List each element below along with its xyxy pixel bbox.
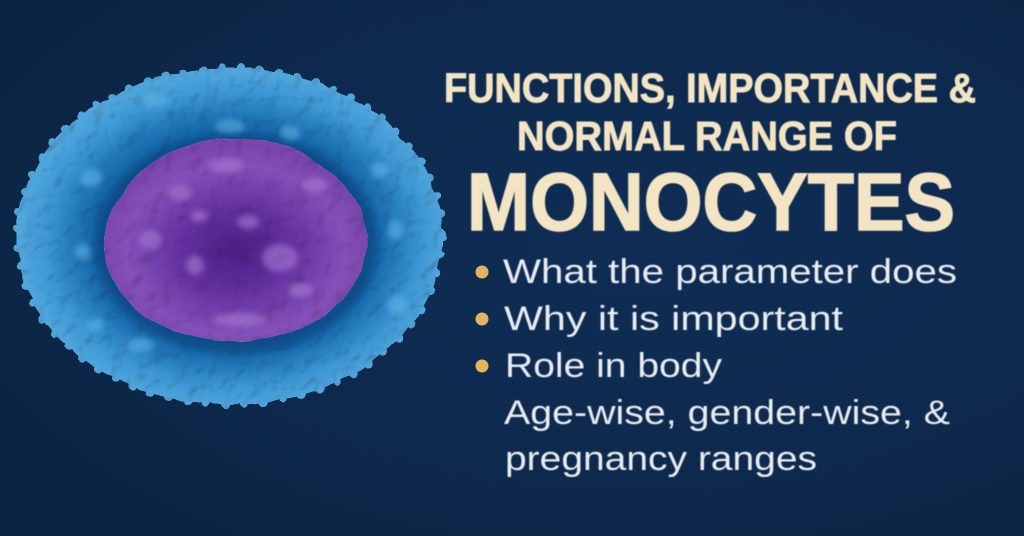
bullet list bbox=[476, 253, 957, 478]
bullet 3: Role in body bbox=[505, 347, 722, 385]
continuation text line 2: pregnancy ranges bbox=[505, 440, 817, 478]
cytoplasm surface granules bbox=[75, 93, 407, 352]
heading bbox=[444, 65, 976, 248]
continuation text line 1: Age-wise, gender-wise, & bbox=[504, 394, 950, 432]
heading line 3: MONOCYTES: MONOCYTES bbox=[467, 157, 955, 248]
cytoplasm: outer blue body with scalloped rim bbox=[16, 68, 442, 404]
illustration: monocyte cell bbox=[16, 68, 442, 404]
bullet 2: Why it is important bbox=[504, 300, 844, 338]
heading line 1: FUNCTIONS, IMPORTANCE & bbox=[444, 65, 976, 111]
nucleus shadow bbox=[94, 134, 378, 354]
bullet 1: What the parameter does bbox=[503, 253, 957, 291]
heading line 2: NORMAL RANGE OF bbox=[517, 113, 897, 159]
nucleus lobes bbox=[139, 158, 328, 327]
nucleus bbox=[104, 139, 367, 341]
